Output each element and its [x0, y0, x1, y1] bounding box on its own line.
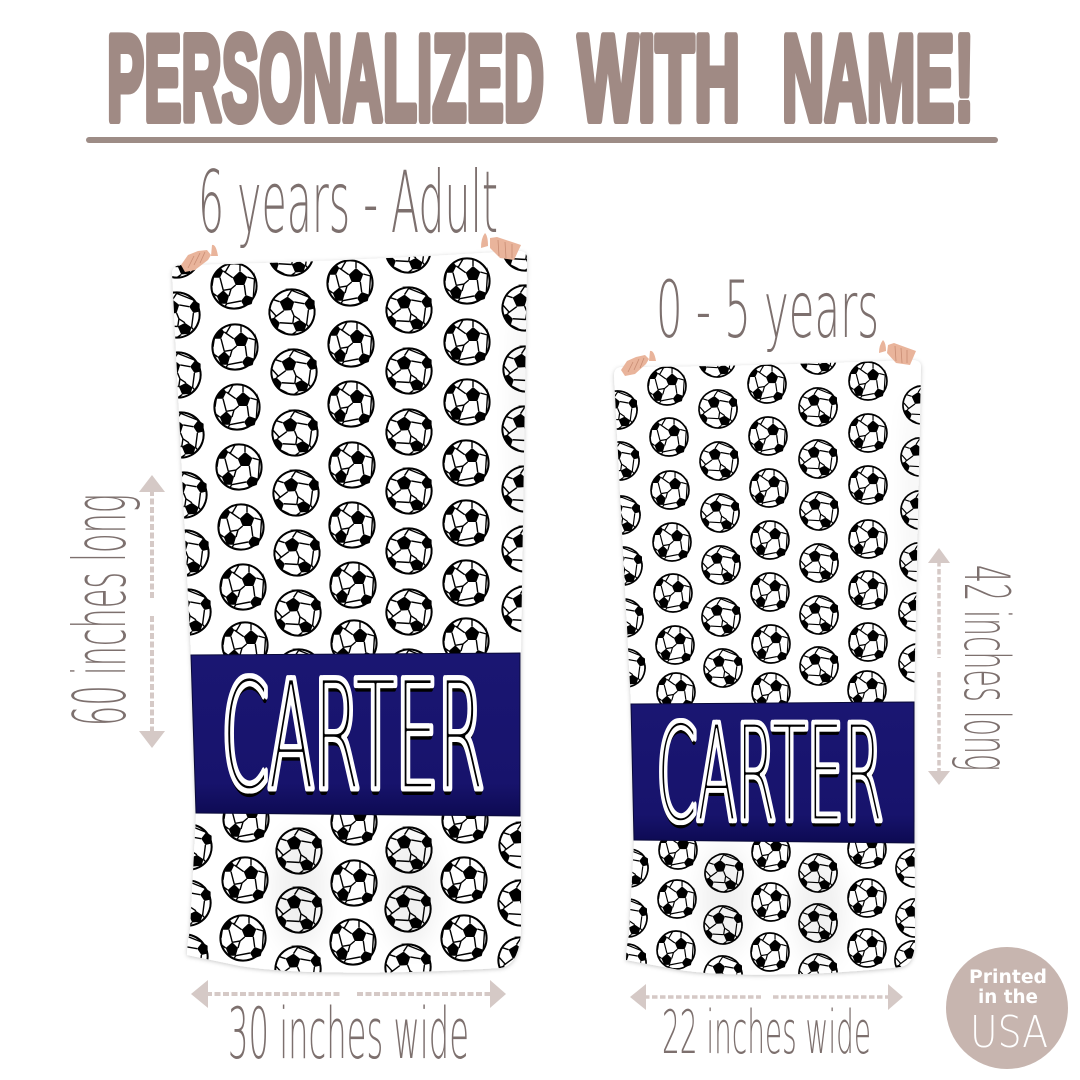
name: CARTER, large towel [220, 650, 486, 826]
arrow: 42 inches long [928, 548, 950, 785]
arrow: 22 inches wide [630, 984, 903, 1010]
icon: hands holding large towel [181, 233, 521, 272]
title: PERSONALIZED [107, 10, 544, 146]
icon: hands holding small towel [621, 340, 916, 376]
small towel [612, 359, 923, 978]
text: 42 inches long [950, 565, 1023, 771]
name band, small towel [631, 702, 914, 843]
badge: printed in the USA: USA [970, 1007, 1048, 1058]
large towel [149, 220, 554, 997]
large towel: CARTER [224, 650, 486, 824]
badge: printed in the USA: Printed [969, 967, 1047, 988]
badge: printed in the USA: in the [978, 987, 1038, 1008]
badge: printed in the USA [946, 947, 1068, 1069]
arrow: 60 inches long [139, 475, 165, 748]
text: 6 years - Adult [198, 153, 498, 253]
arrow: 30 inches wide [191, 980, 506, 1008]
soccer ball pattern, large towel [149, 220, 554, 997]
towel body [172, 251, 527, 973]
text: 30 inches wide [228, 993, 469, 1075]
soccer ball pattern, small towel [594, 331, 946, 999]
title: WITH [578, 10, 740, 146]
towel body [614, 360, 921, 975]
name: CARTER, small towel [656, 698, 884, 854]
heading: 0 - 5 years: 0 - 5 years [656, 266, 879, 356]
title divider [86, 137, 998, 143]
large towel: CARTER [222, 650, 484, 824]
name band, large towel [191, 653, 520, 816]
large towel: CARTER [220, 650, 482, 824]
text: 60 inches long [58, 494, 142, 726]
large towel: CARTER [222, 652, 484, 826]
